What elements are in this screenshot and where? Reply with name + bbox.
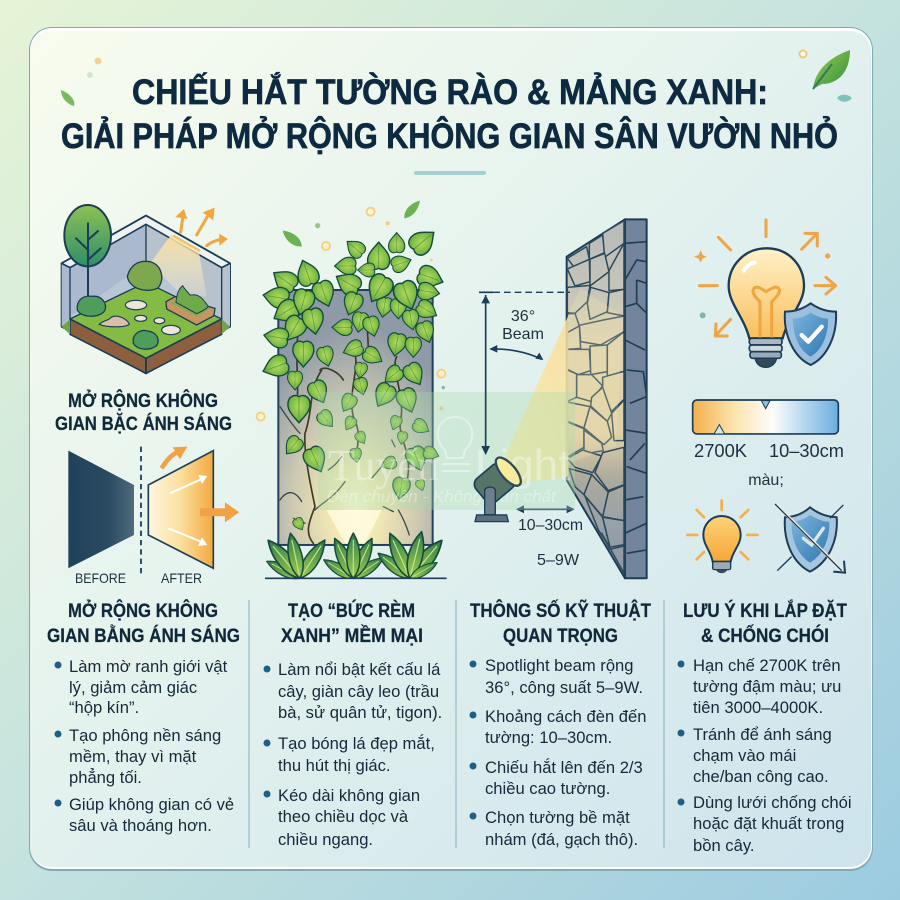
panel: column 4 text: tiên 3000–4000K. (693, 698, 823, 717)
panel: column 3 text (470, 600, 651, 849)
panel: column 2 text: chiều ngang. (278, 830, 373, 849)
panel: column 4 text: tường đậm màu; ưu (693, 677, 841, 696)
panel: column 1 text: MỞ RỘNG KHÔNG (68, 600, 218, 622)
spot labels: 10–30cm (518, 517, 583, 534)
divider line (138, 447, 144, 575)
panel: column 3 text: THÔNG SỐ KỸ THUẬT (470, 600, 651, 622)
icon: crossed shield (775, 504, 845, 573)
beam angle arrow (491, 349, 542, 359)
panel: column 3 text: Spotlight beam rộng (485, 656, 634, 675)
ground (70, 282, 222, 358)
panel: column 2 text: TẠO “BỨC RÈM (288, 600, 415, 622)
panel: column 3 text: QUAN TRỌNG (503, 626, 618, 647)
leaves (268, 264, 301, 296)
panel: column 1 text: phẳng tối. (69, 768, 142, 787)
stones (567, 221, 624, 573)
beam (502, 288, 581, 483)
panel: column 1 text: sâu và thoáng hơn. (69, 816, 212, 835)
panel: column 2 text: cây, giàn cây leo (trầu (278, 682, 439, 701)
cracks and vines (280, 407, 409, 535)
panel: column 3 text: nhám (đá, gạch thô). (485, 830, 638, 849)
label: before: BEFORE (75, 570, 126, 586)
panel: column 3 text: Chiếu hắt lên đến 2/3 (485, 758, 643, 777)
panel: column 1 text: GIAN BẰNG ÁNH SÁNG (47, 625, 240, 647)
panel: column 2 text: Kéo dài không gian (278, 786, 420, 805)
spotlight and height arrow (470, 295, 525, 522)
column dividers (249, 600, 664, 848)
light cone (327, 510, 382, 543)
panel: column 4 text: LƯU Ý KHI LẮP ĐẶT (683, 600, 847, 622)
panel: column 1 text: Giúp không gian có vẻ (69, 795, 234, 814)
subheading: light extended space: MỞ RỘNG KHÔNG (68, 390, 218, 412)
watermark: Tuyến (328, 441, 439, 490)
title divider (414, 171, 486, 175)
panel: column 2 text: bà, sử quân tử, tigon). (278, 703, 442, 722)
temperature labels: 2700K (694, 441, 747, 461)
panel: column 2 text: theo chiều dọc và (278, 807, 409, 826)
panel: column 2 text (264, 600, 442, 849)
spot labels (502, 308, 583, 569)
panel: column 4 text (678, 600, 852, 855)
panel: column 4 text: hoặc đặt khuất trong (693, 814, 844, 833)
ground plants (263, 530, 447, 583)
icon: small bulb (687, 501, 757, 573)
icon: light bulb with shield (694, 220, 836, 367)
colour temperature bar (693, 400, 838, 434)
falling leaves and sparkles (283, 231, 302, 247)
watermark: Đèn chuyên - Không gian chất (327, 487, 557, 506)
panel: column 1 text: Tạo phông nền sáng (69, 726, 221, 745)
title (61, 72, 838, 156)
temperature labels: màu; (748, 472, 784, 489)
after panel (148, 451, 213, 568)
temperature labels (694, 441, 844, 489)
label: after: AFTER (161, 570, 202, 586)
panel: column 1 text (47, 600, 240, 835)
spot labels: Beam (502, 326, 544, 343)
panel: column 4 text: & CHỐNG CHÓI (701, 625, 829, 647)
decorative leaves near title (61, 50, 852, 106)
spot labels: 5–9W (537, 552, 580, 569)
illustration: stone wall and beam (479, 219, 647, 578)
panel: column 3 text: tường: 10–30cm. (485, 728, 612, 747)
planter (166, 297, 215, 325)
panel: column 1 text: lý, giảm cảm giác (69, 678, 197, 697)
diagram: before and after (68, 447, 239, 575)
distance arrow (517, 507, 573, 512)
panel: column 1 text: mềm, thay vì mặt (69, 747, 197, 766)
dashed top line (479, 290, 493, 295)
title: CHIẾU HẮT TƯỜNG RÀO & MẢNG XANH: (132, 72, 768, 112)
subheading: light extended space (55, 390, 232, 435)
stepping stones (125, 300, 147, 310)
watermark: Light (475, 441, 570, 490)
panel: column 4 text: Hạn chế 2700K trên (693, 656, 841, 675)
illustration: climbing plant wall (257, 201, 447, 583)
panel: column 3 text: Chọn tường bề mặt (485, 808, 630, 827)
tree (85, 267, 91, 305)
temperature labels: 10–30cm (769, 441, 844, 461)
panel: column 4 text: Dùng lưới chống chói (693, 793, 852, 812)
panel: column 2 text: Làm nổi bật kết cấu lá (278, 660, 441, 679)
side face (625, 219, 647, 578)
arrows (181, 215, 222, 246)
panel: column 2 text: thu hút thị giác. (278, 756, 391, 775)
panel: column 4 text: bồn cây. (693, 836, 754, 855)
front face (567, 219, 625, 578)
panel: column 3 text: 36°, công suất 5–9W. (485, 678, 643, 697)
panel: column 1 text: “hộp kín”. (69, 698, 139, 717)
watermark (318, 392, 575, 510)
panel: column 2 text: XANH” MỀM MẠI (281, 625, 423, 647)
spot labels: 36° (511, 308, 535, 325)
panel: column 3 text: Khoảng cách đèn đến (485, 707, 646, 726)
illustration: isometric garden (62, 205, 230, 373)
bushes (77, 296, 106, 316)
panel: column 3 text: chiều cao tường. (485, 779, 610, 798)
panel: column 2 text: Tạo bóng lá đẹp mắt, (278, 734, 435, 753)
before panel (68, 451, 134, 568)
panel: column 4 text: chạm vào mái (693, 746, 796, 765)
panel: column 4 text: che/ban công cao. (693, 767, 829, 786)
beam (150, 234, 207, 297)
subheading: light extended space: GIAN BẶC ÁNH SÁNG (55, 413, 232, 435)
panel: column 4 text: Tránh để ánh sáng (693, 725, 832, 744)
panel: column 1 text: Làm mờ ranh giới vật (69, 657, 228, 676)
